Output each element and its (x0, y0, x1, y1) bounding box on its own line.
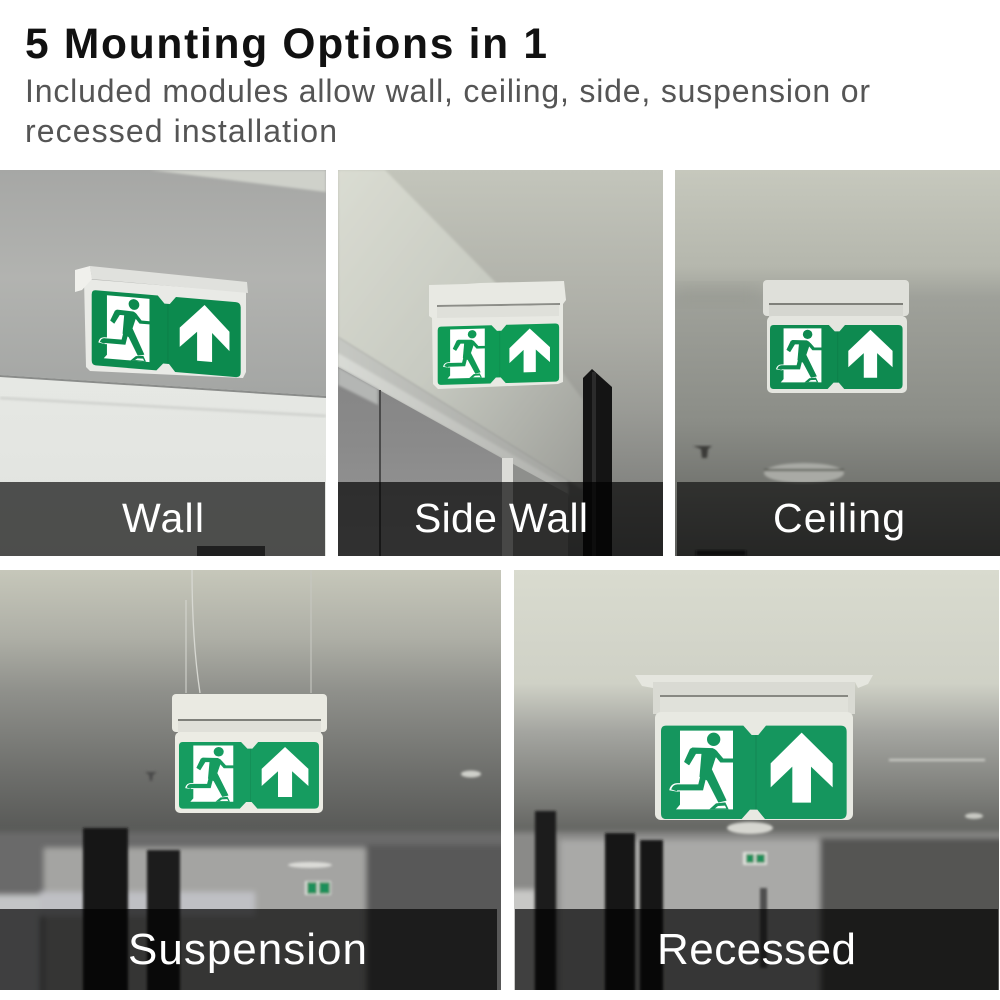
label bar: recessed (515, 909, 998, 990)
panel: side wall (338, 170, 663, 556)
subtitle (25, 73, 870, 149)
panel: ceiling (675, 170, 1000, 556)
panel: wall (0, 170, 326, 560)
sign: suspension mount (172, 694, 327, 813)
sign: recessed mount (635, 675, 873, 820)
sign: wall mount (75, 266, 248, 378)
panel: recessed (494, 570, 1000, 1000)
suspension wires (186, 570, 311, 693)
label bar: wall (0, 482, 325, 556)
label bar: side wall (338, 482, 663, 556)
label bar: ceiling: Ceiling (773, 495, 905, 541)
subtitle: recessed installation (25, 113, 337, 149)
title: 5 Mounting Options in 1 (25, 21, 547, 68)
label bar: suspension: Suspension (128, 925, 367, 974)
panel: suspension (0, 570, 521, 1000)
wall photo background (0, 170, 326, 560)
sign: side wall mount (429, 281, 566, 389)
ceiling photo background (675, 170, 1000, 556)
label bar: side wall: Side Wall (414, 495, 588, 541)
sign: ceiling mount (763, 280, 909, 393)
side wall photo background (338, 170, 663, 556)
recessed photo background (494, 570, 1000, 1000)
label bar: wall: Wall (122, 495, 204, 541)
label bar: recessed: Recessed (657, 925, 856, 974)
label bar: ceiling (677, 482, 1000, 556)
label bar: suspension (0, 909, 497, 990)
subtitle: Included modules allow wall, ceiling, side, suspension or (25, 73, 870, 109)
suspension photo background (0, 570, 521, 1000)
